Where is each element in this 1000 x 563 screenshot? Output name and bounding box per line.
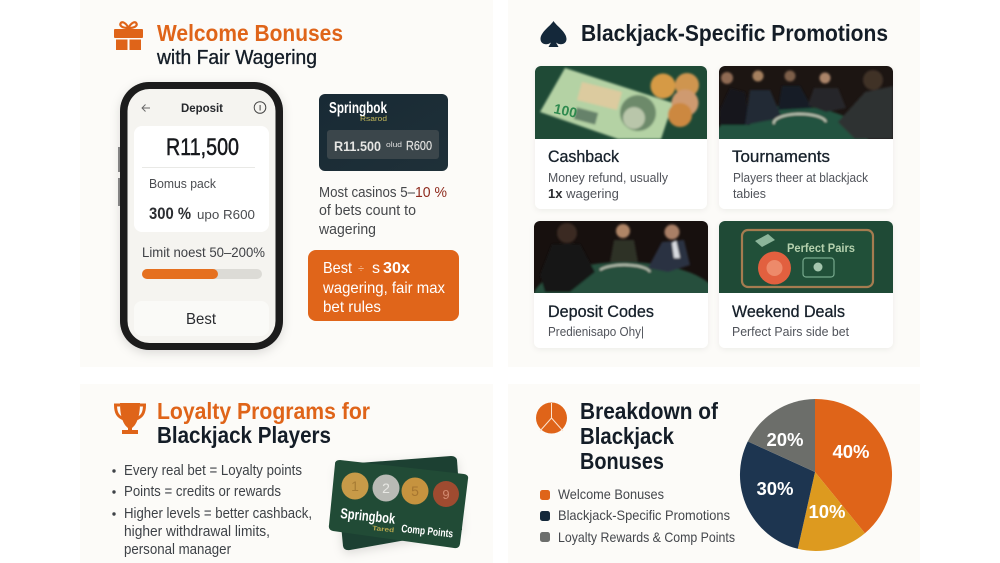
- heading: breakdown: Blackjack: [580, 423, 674, 449]
- springbok card: [319, 94, 448, 171]
- wagering note: Most casinos 5–: [319, 184, 416, 201]
- limit text: Limit noest 50–200%: [142, 244, 265, 260]
- phone mockup: [118, 82, 283, 350]
- callout: best wagering: Best: [323, 260, 353, 277]
- phone header: [142, 102, 266, 115]
- springbok card: Rsarod: [360, 116, 387, 123]
- loyalty coins: 9: [442, 487, 450, 502]
- springbok card: R600: [406, 139, 432, 153]
- icon: trophy: [116, 403, 144, 434]
- card: tournaments: Players theer at blackjack: [733, 170, 868, 185]
- pie chart: 30%: [756, 478, 794, 499]
- heading: loyalty programs: Loyalty Programs for: [157, 398, 370, 424]
- loyalty coins: [342, 472, 459, 507]
- comp points cards: Comp Points: [401, 523, 454, 540]
- icon: gift: [114, 22, 143, 50]
- heading: breakdown: Breakdown of: [580, 398, 718, 424]
- legend: Blackjack-Specific Promotions: [558, 507, 730, 523]
- heading: loyalty programs: Blackjack Players: [157, 422, 331, 448]
- card: deposit codes: [533, 221, 717, 348]
- deposit amount card: Bomus pack: [149, 176, 216, 191]
- loyalty coins: 5: [411, 483, 419, 499]
- best button: Best: [186, 311, 217, 328]
- heading: welcome bonuses: [156, 20, 343, 69]
- springbok card: Springbok: [329, 100, 387, 117]
- card: tournaments: Tournaments: [732, 147, 830, 166]
- panel: blackjack promotions: [530, 21, 896, 353]
- legend: Loyalty Rewards & Comp Points: [558, 529, 735, 545]
- card: deposit codes: Predienisapo Ohy|: [548, 324, 644, 339]
- heading: breakdown: [580, 398, 718, 474]
- wagering note: [318, 184, 447, 238]
- comp points cards: Springbok: [340, 506, 397, 528]
- heading: loyalty programs: [157, 398, 370, 448]
- best button: [134, 301, 269, 336]
- pie chart: 20%: [766, 429, 804, 450]
- springbok card: R11.500: [334, 139, 381, 154]
- card: weekend deals: Weekend Deals: [732, 302, 845, 321]
- loyalty coins: 2: [382, 480, 390, 496]
- heading: breakdown: Bonuses: [580, 448, 664, 474]
- deposit amount card: [134, 126, 269, 232]
- pie chart: [740, 399, 892, 551]
- pie chart: 10%: [808, 501, 846, 522]
- callout: best wagering: wagering, fair max: [322, 280, 445, 297]
- wagering note: wagering: [318, 221, 376, 238]
- springbok card: olud: [386, 142, 402, 149]
- card: cashback: 1x wagering: [548, 186, 619, 201]
- card: cashback: Money refund, usually: [548, 170, 668, 185]
- bullet list: personal manager: [124, 541, 231, 558]
- image: perfect pairs table: Perfect Pairs: [787, 243, 855, 255]
- loyalty coins: 1: [351, 478, 359, 494]
- deposit amount card: R11,500: [166, 134, 239, 161]
- panel: bonus breakdown: [508, 384, 920, 563]
- callout: best wagering: bet rules: [323, 299, 381, 316]
- wagering note: 10 %: [415, 184, 447, 201]
- heading: welcome bonuses: with Fair Wagering: [156, 47, 317, 69]
- image: dealer table: [534, 221, 708, 293]
- image: banknote and coins: [535, 66, 707, 139]
- bullet list: Points = credits or rewards: [124, 483, 281, 500]
- wagering note: of bets count to: [319, 202, 416, 219]
- icon: pie symbol: [536, 402, 567, 434]
- bullet list: higher withdrawal limits,: [124, 523, 270, 540]
- pie chart: 40%: [832, 441, 870, 462]
- legend: Welcome Bonuses: [558, 486, 664, 502]
- progress bar: [142, 269, 262, 279]
- comp points cards: [329, 456, 468, 550]
- heading: welcome bonuses: Welcome Bonuses: [157, 20, 343, 46]
- card: cashback: Cashback: [548, 147, 619, 166]
- bullet list: [112, 462, 312, 558]
- callout: best wagering: ÷: [358, 263, 364, 275]
- image: perfect pairs table: [719, 221, 893, 293]
- card: cashback: [535, 66, 707, 209]
- bullet list: Higher levels = better cashback,: [124, 505, 312, 522]
- panel: welcome bonuses: [80, 0, 493, 367]
- bullet list: Every real bet = Loyalty points: [124, 462, 302, 479]
- image: banknote and coins: 100: [552, 100, 579, 121]
- callout: best wagering: s: [372, 260, 380, 277]
- callout: best wagering: [308, 250, 459, 321]
- card: weekend deals: [719, 221, 893, 348]
- card: tournaments: [712, 66, 893, 209]
- panel: loyalty programs: [80, 384, 493, 563]
- card: weekend deals: Perfect Pairs side bet: [732, 324, 849, 339]
- comp points cards: Tared: [372, 525, 394, 534]
- heading: promotions: Blackjack-Specific Promotions: [581, 20, 888, 46]
- phone header: Deposit: [181, 103, 223, 115]
- deposit amount card: upo R600: [197, 207, 255, 222]
- callout: best wagering: 30x: [383, 260, 410, 277]
- card: deposit codes: Deposit Codes: [548, 302, 654, 321]
- legend: [540, 486, 735, 545]
- image: blackjack table players: [719, 66, 893, 139]
- deposit amount card: 300 %: [149, 204, 191, 223]
- card: tournaments: tabies: [733, 186, 766, 201]
- icon: spade: [540, 21, 566, 47]
